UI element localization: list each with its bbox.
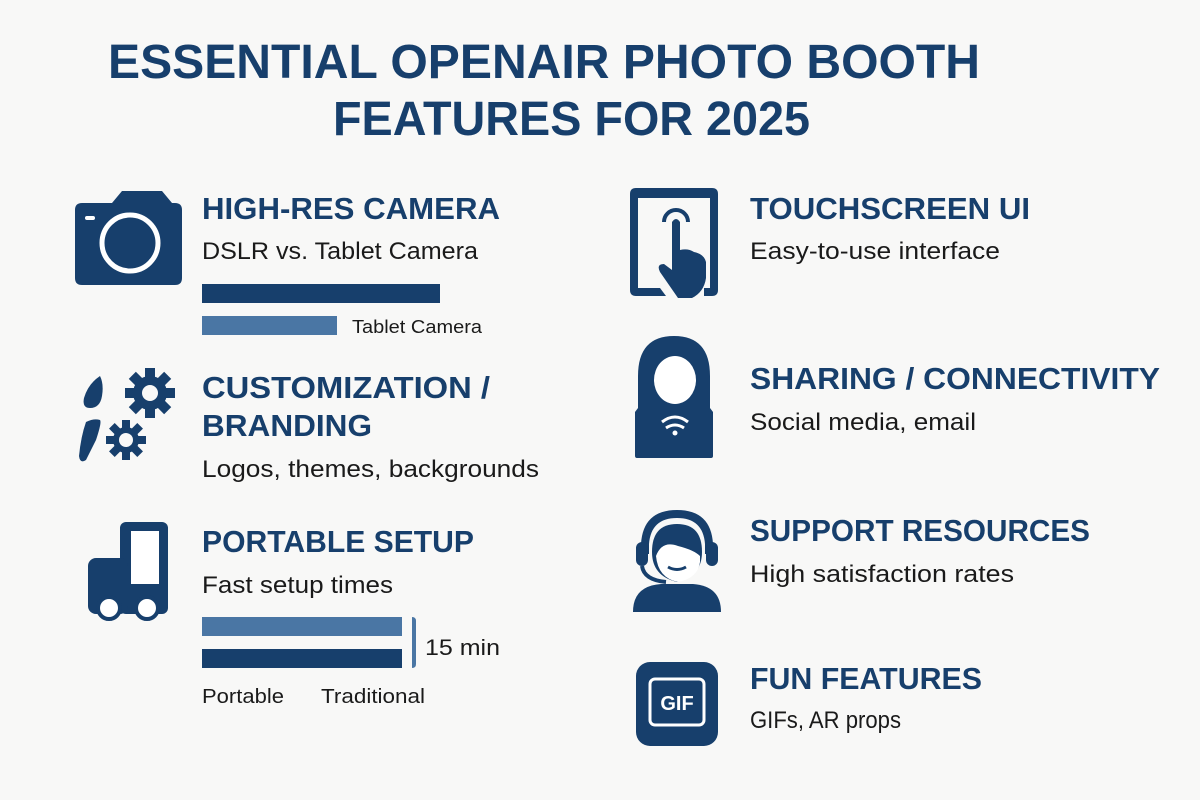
title: ESSENTIAL OPENAIR PHOTO BOOTH — [108, 36, 980, 89]
subtitle: logos: Logos, themes, backgrounds — [202, 456, 539, 483]
subtitle: fast setup: Fast setup times — [202, 572, 393, 599]
bar chart: setup times: 15 min — [425, 635, 500, 660]
icon: portable truck — [88, 522, 168, 619]
heading: support resources: SUPPORT RESOURCES — [750, 513, 1090, 548]
icon: brush and gears — [79, 368, 175, 461]
heading: touchscreen UI: TOUCHSCREEN UI — [750, 191, 1030, 226]
subtitle: easy-to-use: Easy-to-use interface — [750, 238, 1000, 265]
icon: GIF: GIF — [660, 693, 694, 715]
subtitle: DSLR vs tablet: DSLR vs. Tablet Camera — [202, 238, 479, 265]
heading: customization / branding — [202, 370, 490, 443]
heading: customization / branding: CUSTOMIZATION / — [202, 370, 490, 405]
icon: camera — [75, 191, 182, 285]
icon: support agent — [633, 510, 721, 612]
subtitle: satisfaction: High satisfaction rates — [750, 561, 1014, 588]
title: FEATURES FOR 2025 — [333, 93, 810, 146]
title — [108, 36, 980, 146]
bar chart: camera comparison — [202, 284, 483, 337]
bar chart: setup times — [202, 617, 500, 708]
heading: sharing / connectivity: SHARING / CONNECTIVITY — [750, 361, 1160, 396]
heading: fun features: FUN FEATURES — [750, 661, 982, 696]
bar chart: camera comparison: Tablet Camera — [352, 317, 483, 337]
bar chart: setup times: Portable — [202, 686, 284, 708]
icon: sharing booth — [635, 336, 713, 458]
heading: customization / branding: BRANDING — [202, 408, 372, 443]
bar chart: setup times: Traditional — [321, 686, 425, 708]
icon: touchscreen — [630, 188, 718, 298]
subtitle: social media: Social media, email — [750, 409, 976, 436]
heading: high-res camera: HIGH-RES CAMERA — [202, 191, 500, 226]
heading: portable setup: PORTABLE SETUP — [202, 524, 474, 559]
subtitle: GIFs AR props: GIFs, AR props — [750, 707, 901, 734]
icon: GIF — [636, 662, 718, 746]
